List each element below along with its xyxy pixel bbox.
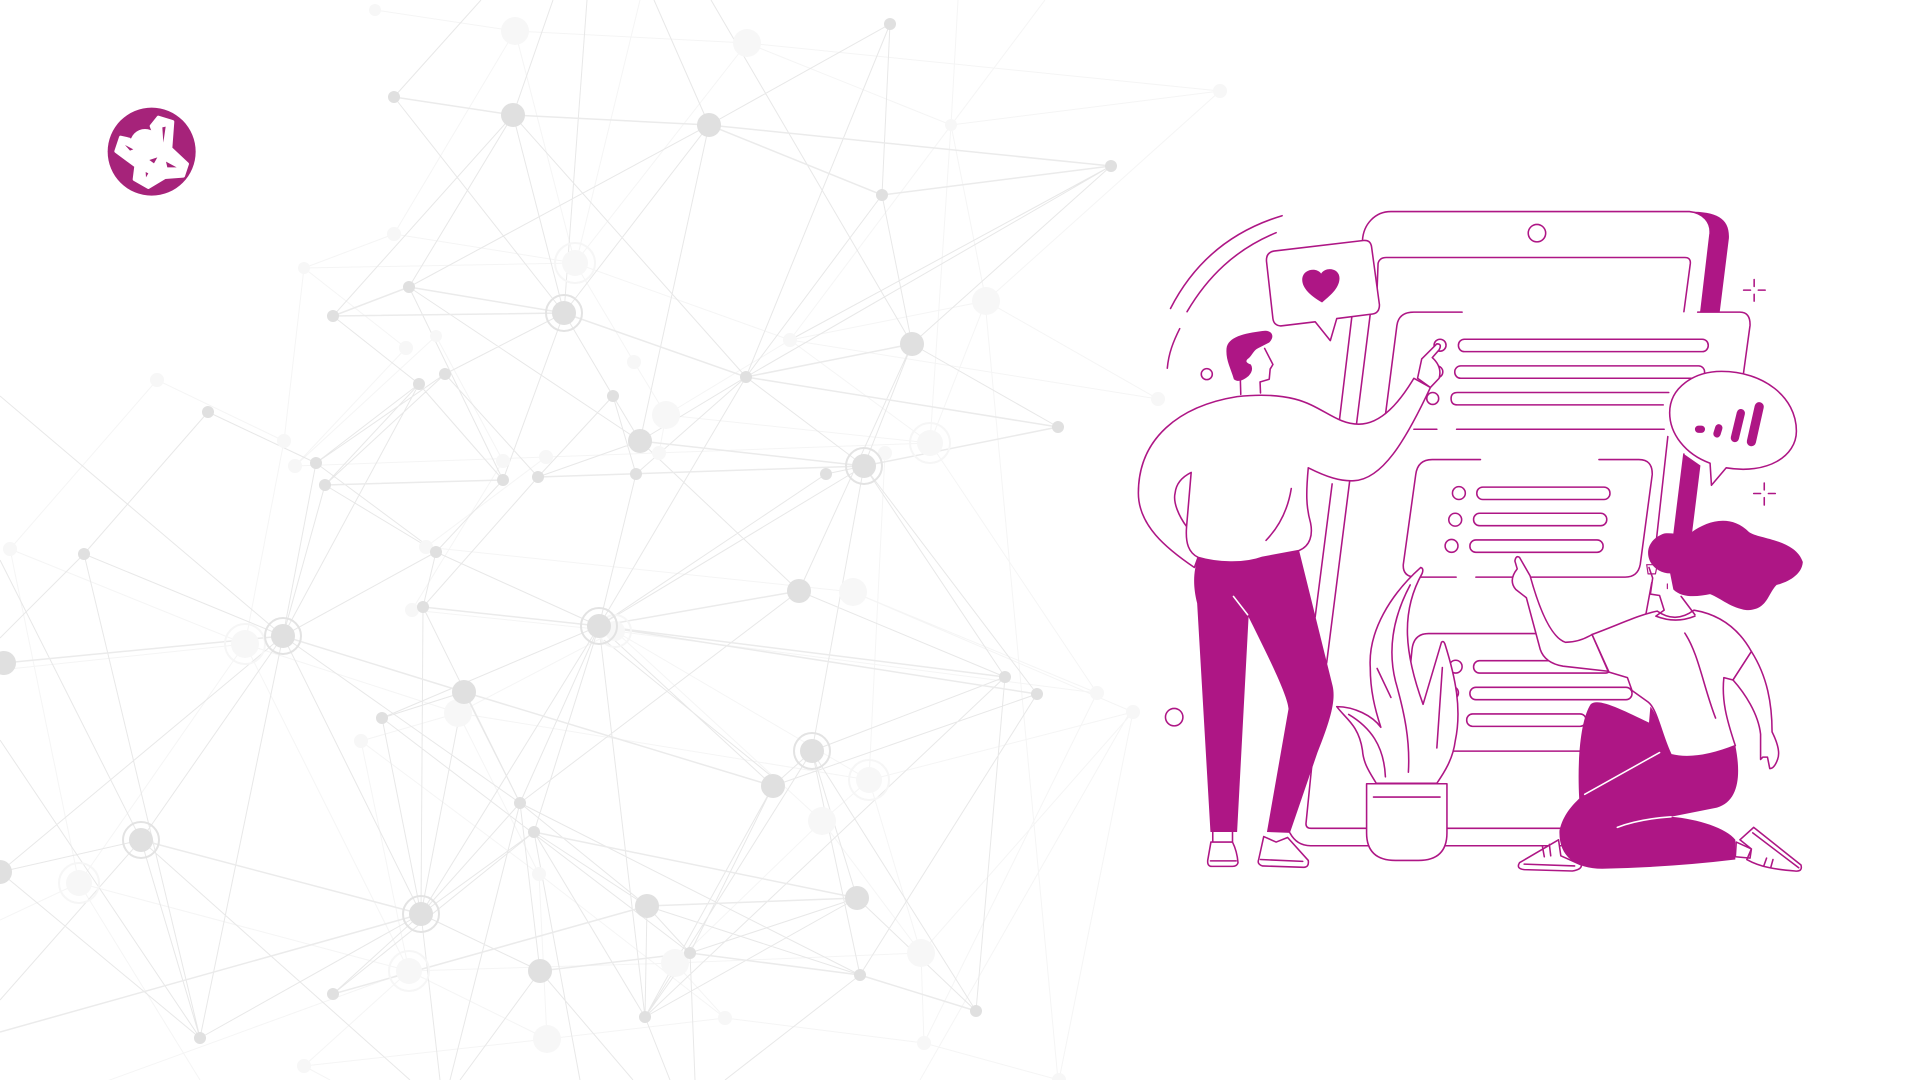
decorative arcs	[1167, 216, 1282, 368]
illustration: people with tablet interface	[1138, 212, 1803, 871]
speech bubble: signal bars	[1670, 371, 1796, 485]
background: faint network nodes	[3, 4, 1227, 1080]
plant	[1337, 567, 1458, 860]
woman shirt fold	[1685, 633, 1716, 718]
woman glasses	[1647, 565, 1667, 589]
plant pot	[1367, 784, 1447, 860]
card: top list	[1385, 312, 1750, 429]
logo: purple circle with white figure	[108, 108, 196, 196]
small circles	[1165, 369, 1212, 726]
woman trouser creases	[1585, 753, 1671, 827]
man sweater fold	[1266, 488, 1291, 540]
woman right arm	[1733, 651, 1779, 769]
woman left shoe	[1518, 840, 1581, 871]
woman face and neck	[1649, 567, 1695, 620]
man: figure	[1138, 331, 1440, 867]
card: middle list	[1403, 460, 1652, 577]
woman raised arm	[1512, 557, 1608, 671]
background: main network nodes	[0, 18, 1117, 1044]
speech bubble: heart	[1266, 240, 1379, 341]
tablet outline	[1290, 212, 1710, 846]
man trousers	[1194, 550, 1334, 833]
man right shoe	[1258, 837, 1308, 867]
woman right shoe	[1735, 827, 1801, 871]
woman shirt	[1592, 610, 1751, 757]
woman: figure	[1512, 521, 1803, 871]
woman hair	[1648, 521, 1803, 610]
card: bottom list	[1409, 634, 1632, 751]
tablet dark edge	[1673, 212, 1729, 544]
man hand	[1418, 344, 1440, 387]
man sweater	[1138, 378, 1430, 567]
man neck and face	[1240, 348, 1273, 394]
background: faint network layer	[0, 0, 1220, 1080]
background: main network thin connections	[0, 0, 1111, 1080]
sparkles	[1744, 280, 1775, 505]
man hair	[1226, 331, 1272, 381]
man trouser crease	[1233, 596, 1248, 615]
man left shoe	[1208, 832, 1238, 866]
background: main network thick connections	[0, 97, 1111, 1032]
woman trousers	[1559, 702, 1738, 869]
tablet camera	[1528, 224, 1546, 242]
